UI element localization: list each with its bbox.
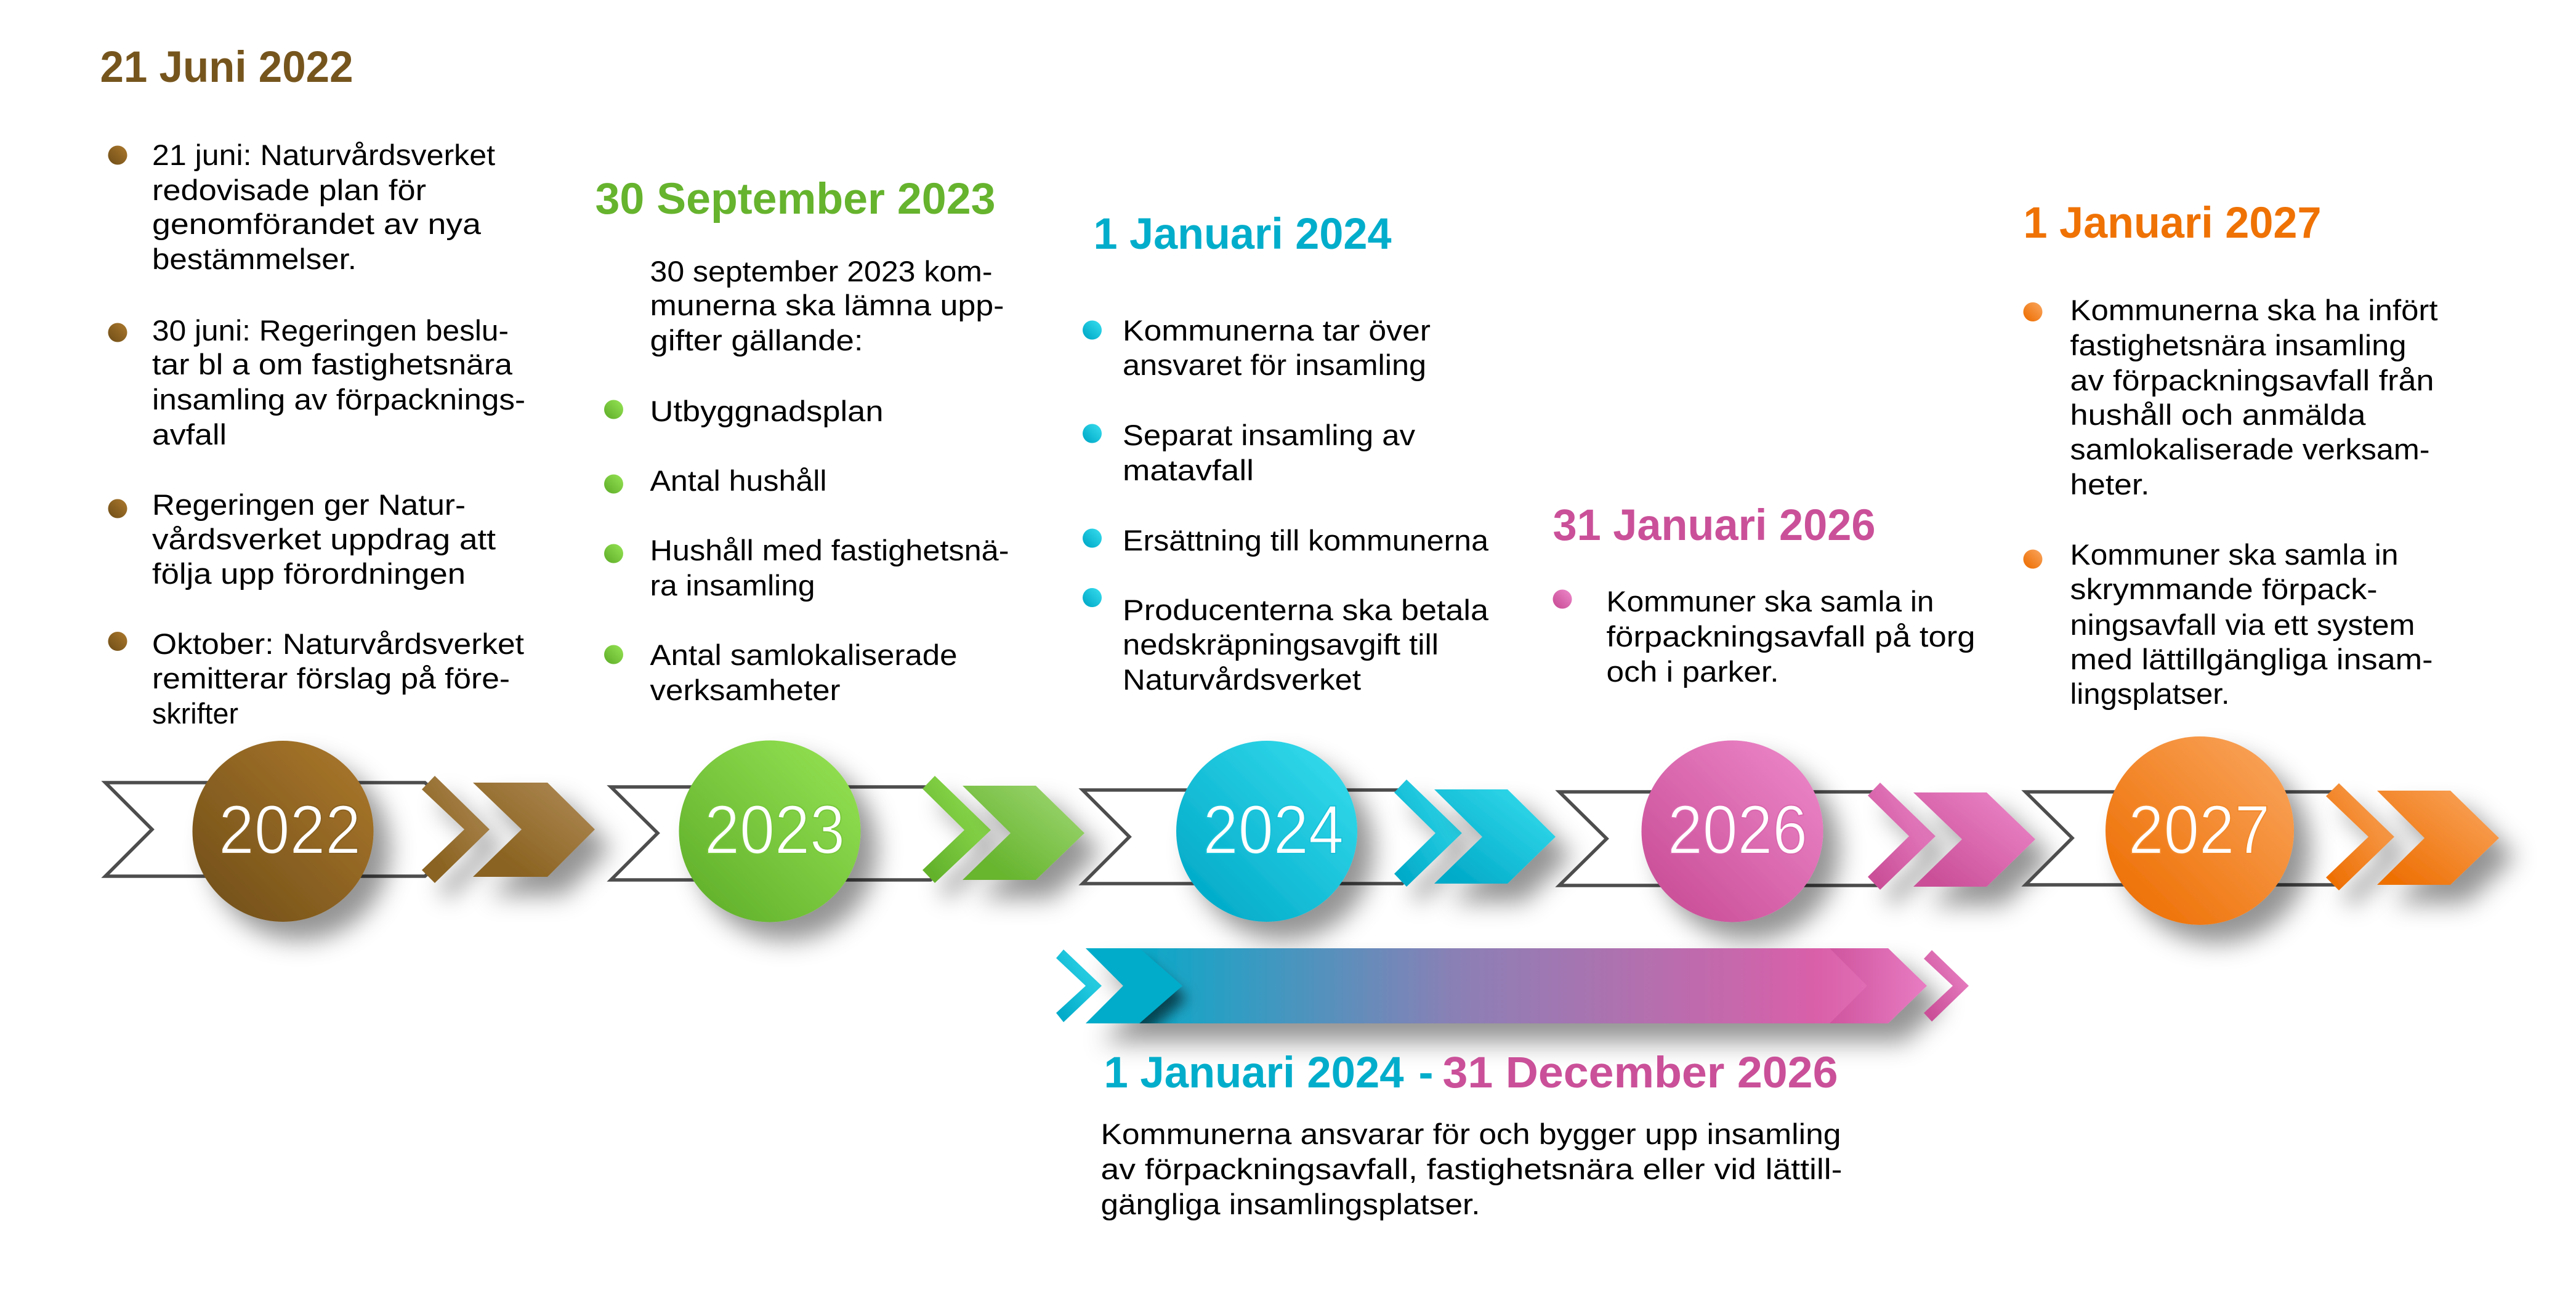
year label 2023: 2023 (705, 791, 845, 868)
bullet dot (604, 400, 623, 419)
text block: period description (1101, 1118, 1843, 1220)
text block: Oktober (152, 627, 524, 730)
heading: 1 Januari 2024 - 31 December 2026: 1 Januari 2024 (1104, 1049, 1404, 1097)
year circle 2024 (1176, 741, 1357, 922)
bullet dot (1083, 588, 1102, 607)
small chevron arrow (2326, 783, 2394, 890)
text block: period description: gängliga insamlingsplatser. (1101, 1188, 1480, 1220)
text block: Producenterna (1123, 594, 1489, 696)
year circle 2022 (192, 741, 373, 922)
text block: Kommunerna tar över (1123, 314, 1431, 381)
text block: 21 juni: redovisade plan för (152, 174, 426, 206)
bullet dot (108, 145, 127, 165)
heading: 21 Juni 2022: 21 Juni 2022 (100, 43, 353, 92)
text block: 30 juni: tar bl a om fastighetsnära (152, 348, 513, 381)
year circle 2023 (679, 740, 861, 922)
big chevron arrow (1434, 789, 1556, 884)
text block: 30 juni: 30 juni: Regeringen beslu- (152, 314, 509, 347)
text block: Regeringen ger: vårdsverket uppdrag att (152, 523, 496, 555)
gradient bar (1086, 948, 1927, 1023)
text block: intro 2023: 30 september 2023 kom- (650, 255, 993, 288)
text block: Kommunerna ska ha infört: Kommunerna ska ha infört (2070, 294, 2437, 326)
bullet dot (108, 323, 127, 342)
heading: 31 Januari 2026: 31 Januari 2026 (1553, 501, 1876, 550)
heading: 1 Januari 2024 - 31 December 2026: 31 December 2026 (1442, 1049, 1838, 1097)
text block: Regeringen ger: följa upp förordningen (152, 557, 466, 590)
text block: Oktober: Oktober: Naturvårdsverket (152, 627, 524, 660)
text block: Antal samlokaliserade: verksamheter (650, 674, 840, 706)
text block: Kommunerna ska ha infört: samlokaliserade verksam- (2070, 433, 2430, 466)
text block: Kommuner ska samla in: förpackningsavfall på torg (1606, 620, 1976, 653)
text block: period description: av förpackningsavfall, fastighetsnära eller vid lättill- (1101, 1153, 1843, 1185)
text block: Kommunerna ska ha infört: fastighetsnära insamling (2070, 329, 2407, 361)
small pink chevron (1924, 950, 1969, 1022)
timeline segment: 2026 (1559, 740, 2035, 922)
year circle 2027 (2106, 736, 2294, 925)
panel: 2027 text (2024, 199, 2437, 710)
bullet dot (2024, 549, 2042, 569)
year label 2027: 2027 (2128, 791, 2270, 868)
text block: Kommuner ska samla in (1606, 585, 1976, 688)
text block: Oktober: remitterar förslag på före- (152, 662, 510, 695)
small chevron arrow (923, 776, 991, 883)
text block: Kommunerna ska ha infört (2070, 294, 2437, 501)
panel: 2022 text (100, 43, 525, 730)
bullet dot (604, 474, 623, 494)
text block: Kommunerna ska ha infört: av förpackningsavfall från (2070, 364, 2434, 397)
panel: period text (1101, 1049, 1843, 1220)
heading: 1 Januari 2024: 1 Januari 2024 (1094, 210, 1392, 259)
bullet dot (1083, 424, 1102, 443)
heading: 30 September 2023: 30 September 2023 (595, 175, 995, 224)
bar chevron shadings (1086, 948, 1927, 1023)
text block: Regeringen ger (152, 488, 496, 590)
text block: Kommuner ska samla in: Kommuner ska samla in (1606, 585, 1934, 618)
text block: Oktober: skrifter (152, 697, 238, 730)
text block: Kommuner ska samla in skrymmande: ningsavfall via ett system (2070, 608, 2415, 641)
pink chevron head (1830, 948, 1927, 1023)
ribbon outline (1559, 792, 1924, 885)
timeline segment: 2023 (611, 740, 1084, 922)
timeline segment: 2022 (105, 741, 595, 922)
text: Utbyggnadsplan: Utbyggnadsplan (650, 395, 883, 427)
bullet list 2022 (108, 139, 525, 730)
text block: 30 juni (152, 314, 525, 451)
panel: 2026 text (1553, 501, 1976, 688)
text block: Kommunerna tar över: ansvaret för insamling (1123, 349, 1426, 381)
heading: 1 Januari 2024 - 31 December 2026: - (1419, 1049, 1434, 1097)
text block: Kommunerna tar över: Kommunerna tar över (1123, 314, 1431, 347)
panel: 2024 text (1083, 210, 1489, 696)
small teal chevron (1056, 949, 1102, 1022)
year label 2024: 2024 (1203, 791, 1344, 868)
text block: 21 juni (152, 139, 495, 275)
text block: Kommuner ska samla in skrymmande (2070, 538, 2433, 710)
text block: Producenterna: Producenterna ska betala (1123, 594, 1489, 626)
text block: Kommunerna ska ha infört: heter. (2070, 468, 2149, 501)
text block: Regeringen ger: Regeringen ger Natur- (152, 488, 466, 521)
year circle 2026 (1642, 740, 1823, 922)
text block: intro 2023: gifter gällande: (650, 324, 863, 357)
text block: Kommuner ska samla in skrymmande: Kommuner ska samla in (2070, 538, 2398, 571)
big chevron arrow (963, 786, 1084, 880)
ribbon outline (105, 783, 475, 876)
bullet dot (1553, 590, 1572, 608)
year label 2026: 2026 (1668, 791, 1807, 868)
small chevron arrow (1868, 783, 1936, 890)
heading: 1 Januari 2024 - 31 December 2026 (1104, 1049, 1838, 1097)
ribbon outline (2025, 792, 2381, 885)
bullet dot (1083, 320, 1102, 340)
small chevron arrow (1394, 780, 1462, 887)
bullet dot (2024, 302, 2042, 321)
timeline segment: 2024 (1083, 741, 1556, 922)
timeline segment: 2027 (2025, 736, 2499, 925)
text block: Separat insamling: matavfall (1123, 454, 1254, 486)
ribbon outline (1083, 790, 1449, 884)
ribbon outline (611, 787, 978, 880)
year label 2022: 2022 (219, 791, 361, 868)
text block: Separat insamling (1123, 419, 1416, 486)
bullet dot (604, 544, 623, 563)
text block: Kommunerna ska ha infört: hushåll och anmälda (2070, 398, 2366, 431)
text: Antal hushåll: Antal hushåll (650, 464, 826, 497)
text block: Producenterna: nedskräpningsavgift till (1123, 628, 1439, 661)
big chevron arrow (2377, 791, 2499, 885)
text block: 21 juni: 21 juni: Naturvårdsverket (152, 139, 495, 171)
big chevron arrow (473, 783, 595, 877)
period bar 2024-2026 (1056, 948, 1969, 1023)
text block: 21 juni: genomförandet av nya (152, 208, 482, 240)
text block: Hushåll med (650, 534, 1009, 602)
bullet dot (108, 632, 127, 651)
text: Ersättning: Ersättning till kommunerna (1123, 524, 1489, 557)
bullet dot (1083, 528, 1102, 548)
text block: 30 juni: avfall (152, 418, 227, 451)
text block: period description: Kommunerna ansvarar för och bygger upp insamling (1101, 1118, 1841, 1150)
text block: Producenterna: Naturvårdsverket (1123, 663, 1361, 696)
panel: 2023 text (595, 175, 1009, 706)
text block: intro 2023 (650, 255, 1004, 357)
text block: Antal samlokaliserade: Antal samlokaliserade (650, 639, 957, 671)
text block: 30 juni: insamling av förpacknings- (152, 383, 525, 416)
text block: Kommuner ska samla in skrymmande: skrymmande förpack- (2070, 573, 2377, 605)
text block: Separat insamling: Separat insamling av (1123, 419, 1416, 451)
text block: Kommuner ska samla in skrymmande: lingsplatser. (2070, 677, 2229, 710)
text block: intro 2023: munerna ska lämna upp- (650, 289, 1004, 321)
heading: 1 Januari 2027: 1 Januari 2027 (2024, 199, 2322, 248)
bullet dot (108, 499, 127, 518)
text block: Kommuner ska samla in: och i parker. (1606, 655, 1779, 688)
teal chevron head (1086, 948, 1182, 1023)
bullet dot (604, 645, 623, 664)
text block: Hushåll med: ra insamling (650, 569, 815, 602)
text block: 21 juni: bestämmelser. (152, 243, 357, 275)
text block: Kommuner ska samla in skrymmande: med lättillgängliga insam- (2070, 643, 2433, 675)
text block: Antal samlokaliserade (650, 639, 957, 706)
big chevron arrow (1913, 792, 2035, 887)
text block: Hushåll med: Hushåll med fastighetsnä- (650, 534, 1009, 566)
small chevron arrow (422, 776, 490, 883)
